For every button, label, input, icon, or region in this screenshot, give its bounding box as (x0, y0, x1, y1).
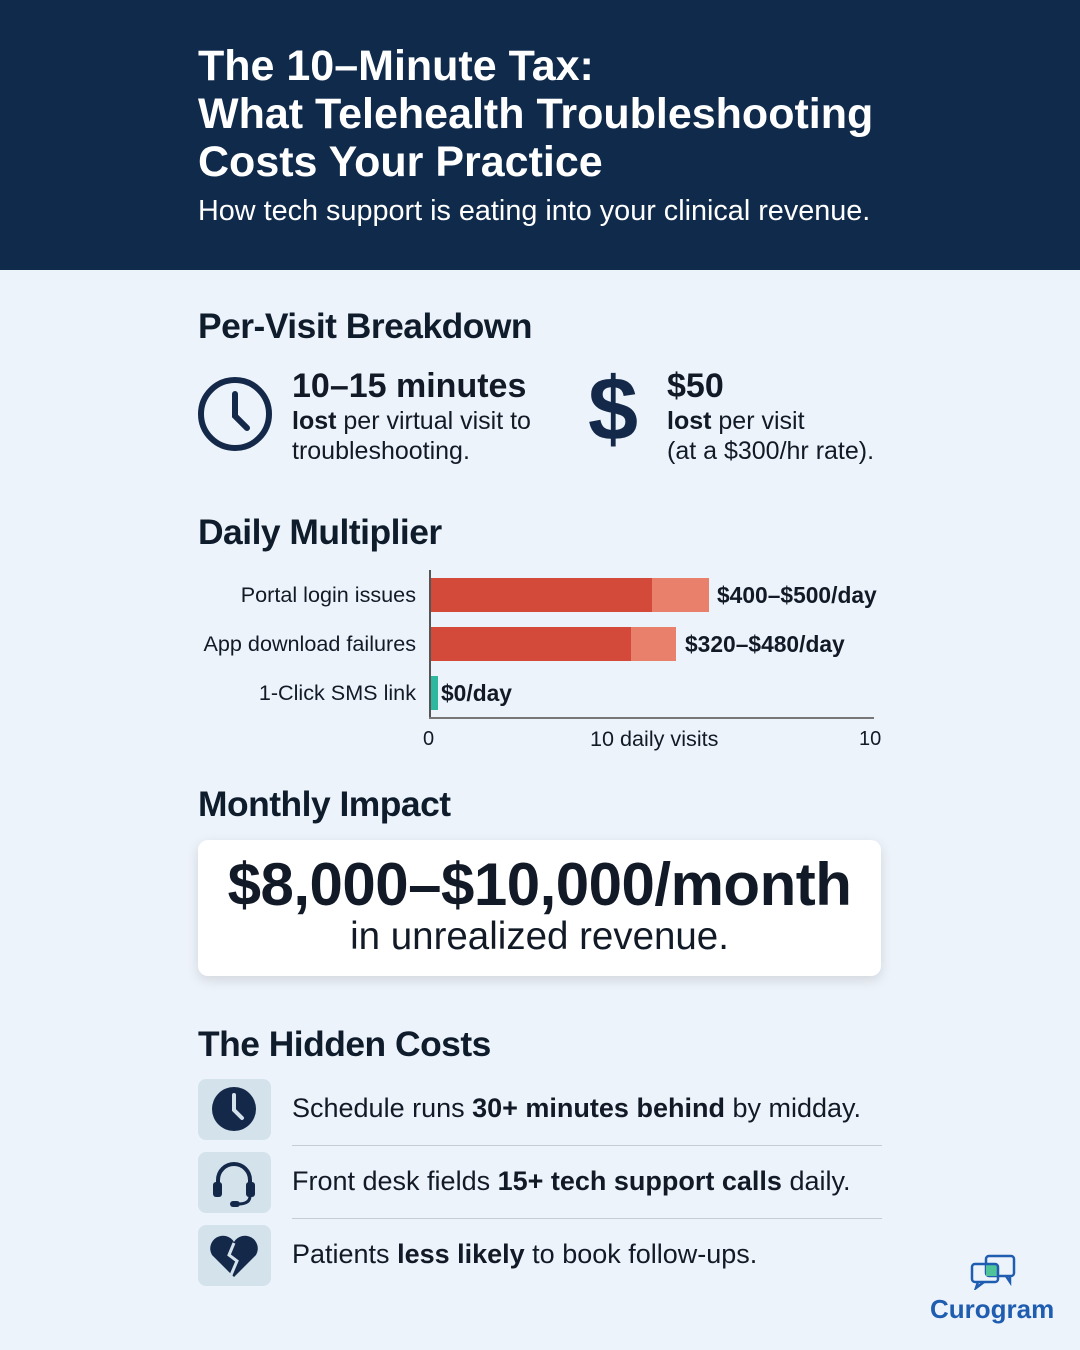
title (198, 42, 873, 186)
bar chart: 10 daily visits (590, 726, 718, 751)
icon: clock (198, 377, 272, 451)
icon: broken heart (198, 1225, 271, 1286)
heading: daily multiplier: Daily Multiplier (198, 512, 442, 552)
bar chart: $320–$480/day (685, 631, 845, 657)
bar chart: 10 (859, 728, 881, 750)
stat: dollars lost: $50 (667, 367, 724, 405)
stat: minutes lost: 10–15 minutes (292, 367, 526, 405)
bar chart: $400–$500/day (717, 582, 877, 608)
list: hidden costs: Front desk fields 15+ tech support calls daily. (292, 1166, 850, 1196)
header banner (0, 0, 1080, 270)
title: Costs Your Practice (198, 138, 603, 186)
logo: Curogram: Curogram (930, 1294, 1054, 1324)
stat: minutes lost: lost per virtual visit to (292, 407, 531, 435)
title: What Telehealth Troubleshooting (198, 90, 873, 138)
bar chart: Portal login issues (241, 582, 416, 607)
bar chart: $0/day (441, 680, 512, 706)
subtitle: How tech support is eating into your clinical revenue. (198, 195, 870, 227)
stat: dollars lost: (at a $300/hr rate). (667, 437, 874, 465)
callout: monthly revenue: $8,000–$10,000/month (228, 851, 851, 918)
stat: dollars lost: lost per visit (667, 407, 805, 435)
stat: dollars lost (667, 367, 874, 465)
icon: dollar: $ (588, 360, 638, 460)
bar chart: 1-Click SMS link (259, 680, 416, 705)
title: The 10–Minute Tax: (198, 42, 594, 90)
icon: headset (198, 1152, 271, 1213)
heading: monthly impact: Monthly Impact (198, 784, 451, 824)
list: hidden costs (198, 1079, 882, 1286)
heading: hidden costs: The Hidden Costs (198, 1024, 491, 1064)
callout: monthly revenue (198, 840, 881, 976)
bar chart: 0 (423, 728, 434, 750)
heading: per-visit breakdown: Per-Visit Breakdown (198, 306, 532, 346)
list: hidden costs: Patients less likely to book follow-ups. (292, 1239, 757, 1269)
bar chart (204, 570, 881, 751)
logo: Curogram (930, 1254, 1054, 1324)
callout: monthly revenue: in unrealized revenue. (350, 915, 729, 958)
bar chart: App download failures (204, 631, 416, 656)
stat: minutes lost (292, 367, 531, 465)
icon: clock (198, 1079, 271, 1140)
list: hidden costs: Schedule runs 30+ minutes behind by midday. (292, 1093, 861, 1123)
stat: minutes lost: troubleshooting. (292, 437, 470, 465)
